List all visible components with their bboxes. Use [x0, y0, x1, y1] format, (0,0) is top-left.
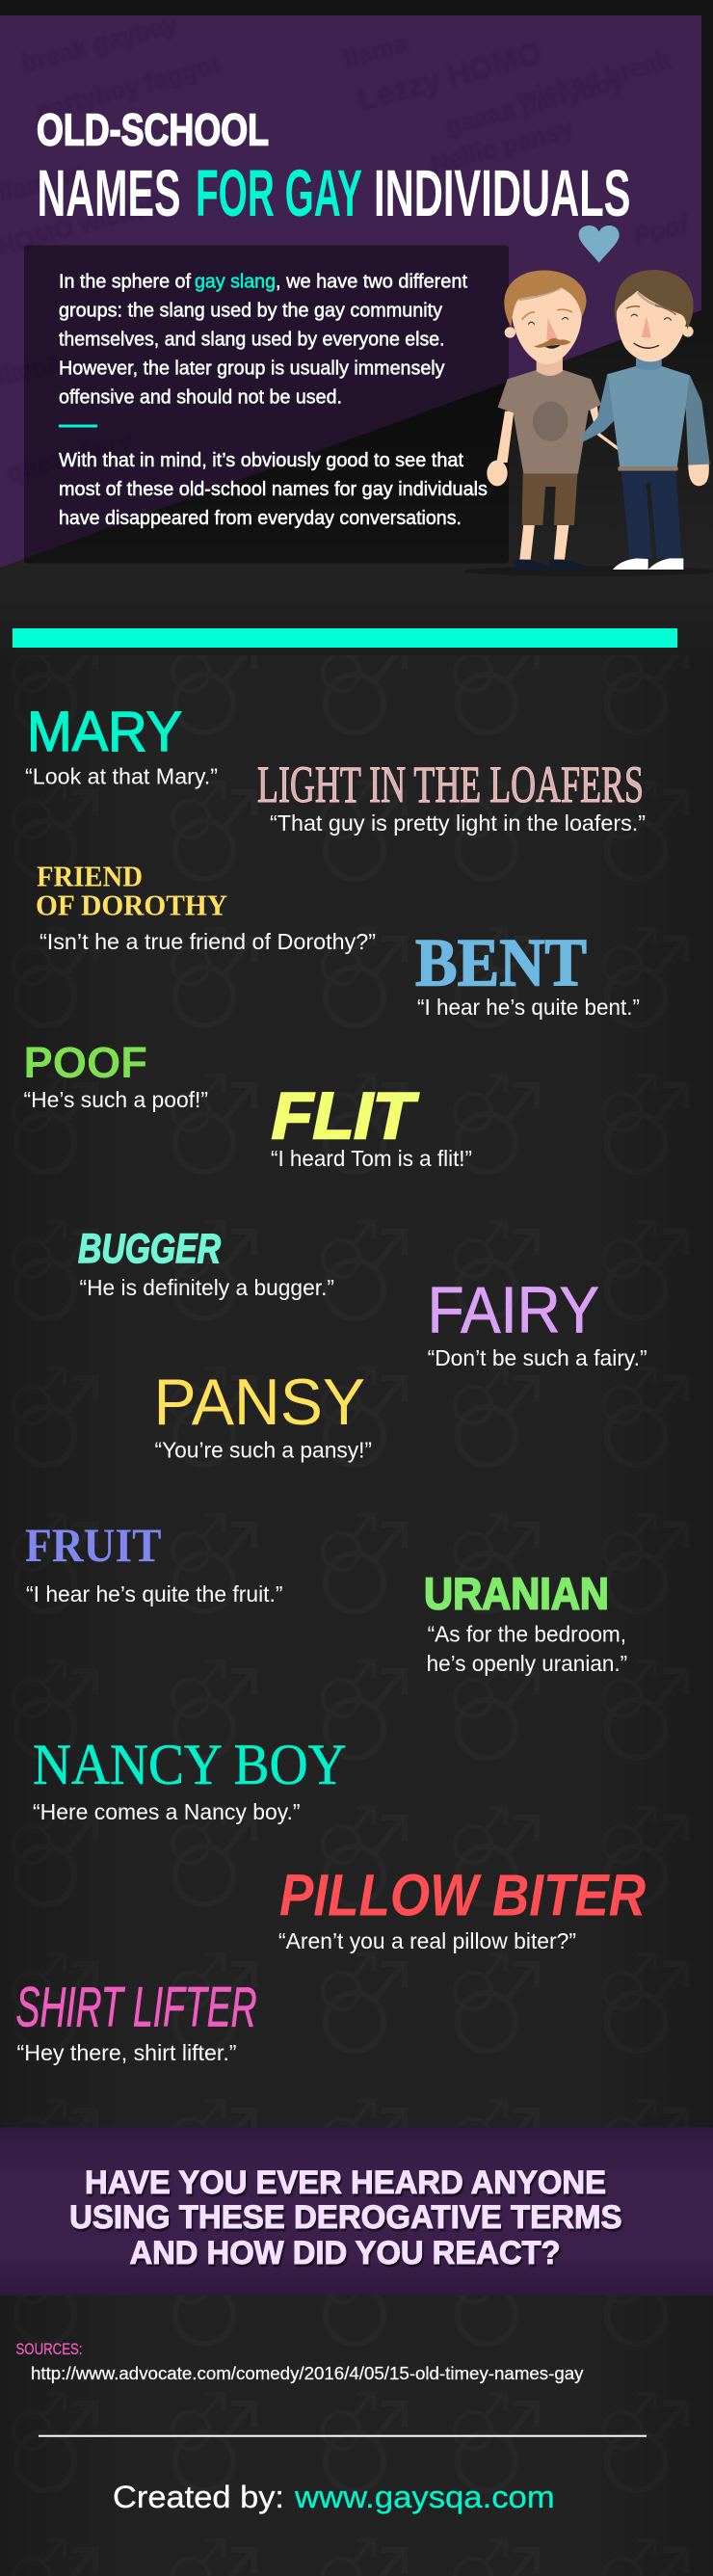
intro paragraph 1: , we have two different — [276, 271, 467, 292]
term: Flit: FLIT — [272, 1079, 419, 1153]
intro paragraph 1: groups: the slang used by the gay community — [59, 300, 442, 321]
intro paragraph 1: In the sphere of — [59, 271, 191, 292]
term: Uranian: he’s openly uranian.” — [427, 1651, 627, 1676]
intro paragraph 1: themselves, and slang used by everyone else. — [59, 329, 445, 350]
term: Poof: “He’s such a poof!” — [23, 1087, 208, 1112]
term: Uranian: URANIAN — [424, 1569, 609, 1619]
term: Fairy — [428, 1274, 647, 1370]
header background: queer fairy — [4, 426, 135, 488]
term: Pansy: PANSY — [154, 1366, 365, 1439]
term: Fairy: FAIRY — [428, 1274, 599, 1347]
title line 1: OLD-SCHOOL — [37, 104, 269, 154]
panel: intro text — [24, 245, 509, 563]
footer credit: www.gaysqa.com — [294, 2480, 555, 2514]
term: Uranian: “As for the bedroom, — [428, 1621, 626, 1646]
term: Bent: “I hear he’s quite bent.” — [417, 995, 640, 1020]
term: Nancy boy: NANCY BOY — [33, 1733, 347, 1796]
question text: AND HOW DID YOU REACT? — [129, 2235, 561, 2271]
header background: partyboy faggot — [33, 49, 224, 126]
header background: gaaaa partyboy — [442, 65, 627, 141]
question text — [69, 2164, 622, 2271]
sources: http://www.advocate.com/comedy/2016/4/05/15-old-timey-names-gay — [31, 2364, 584, 2383]
intro paragraph 1: gay slang — [195, 271, 276, 292]
man in blue sweater — [583, 270, 710, 570]
term: Pillow biter — [278, 1862, 646, 1953]
ground shadow — [464, 566, 713, 576]
term: Poof: POOF — [23, 1038, 147, 1087]
title — [37, 104, 630, 230]
illustration: couple with heart — [464, 226, 713, 576]
icon: heart — [579, 226, 620, 263]
term: Nancy boy — [33, 1733, 347, 1824]
header background: llama — [341, 28, 410, 73]
term: Friend of Dorothy: FRIEND — [37, 859, 143, 892]
term: Flit: “I heard Tom is a flit!” — [271, 1146, 472, 1171]
intro paragraph 2: most of these old-school names for gay individuals — [59, 479, 488, 500]
footer credit — [113, 2480, 555, 2514]
sources — [15, 2340, 584, 2383]
term: Friend of Dorothy: “Isn’t he a true friend of Dorothy?” — [40, 929, 376, 954]
intro paragraph 1: offensive and should not be used. — [59, 386, 342, 408]
term: Bent: BENT — [415, 926, 587, 1001]
term: Light in the loafers — [257, 756, 646, 836]
term: Fairy: “Don’t be such a fairy.” — [428, 1345, 647, 1370]
question text: HAVE YOU EVER HEARD ANYONE — [85, 2164, 606, 2201]
term: Pansy: “You’re such a pansy!” — [154, 1438, 372, 1463]
intro paragraph 1: However, the later group is usually immensely — [59, 358, 445, 379]
term: Light in the loafers: “That guy is pretty light in the loafers.” — [270, 810, 646, 836]
term: Bugger — [78, 1226, 334, 1300]
header background: Poof — [630, 208, 694, 252]
term: Bugger: “He is definitely a bugger.” — [79, 1275, 334, 1300]
sources: SOURCES: — [15, 2340, 83, 2358]
header background: JUICY — [505, 277, 584, 324]
title line 2: NAMES — [37, 156, 181, 230]
term: Mary: MARY — [27, 701, 182, 763]
panel: call to action — [0, 2128, 713, 2296]
intro paragraph 2: With that in mind, it’s obviously good to see that — [59, 450, 463, 471]
term: Poof — [23, 1038, 208, 1112]
divider bar — [13, 628, 677, 648]
header background: Nellie pansy — [428, 113, 577, 179]
header background — [0, 0, 713, 655]
man with mustache — [487, 271, 618, 570]
header background: break gaybay — [18, 9, 181, 78]
term: Mary — [25, 701, 218, 789]
term: Pillow biter: “Aren’t you a real pillow biter?” — [278, 1928, 576, 1953]
intro paragraph 1 — [59, 271, 467, 408]
intro paragraph 2 — [59, 450, 488, 529]
term: Shirt lifter: “Hey there, shirt lifter.” — [17, 2040, 237, 2065]
term: Pillow biter: PILLOW BITER — [279, 1862, 646, 1927]
term: Fruit — [25, 1518, 283, 1607]
footer credit: Created by: — [113, 2480, 284, 2514]
term: Bent — [415, 926, 640, 1020]
term: Shirt lifter: SHIRT LIFTER — [15, 1977, 256, 2039]
term: Bugger: BUGGER — [78, 1226, 221, 1272]
term: Mary: “Look at that Mary.” — [25, 764, 218, 789]
term: Fruit: “I hear he’s quite the fruit.” — [26, 1581, 283, 1607]
question text: USING THESE DEROGATIVE TERMS — [69, 2199, 622, 2236]
title line 2: FOR GAY — [196, 156, 362, 230]
term: Friend of Dorothy — [36, 859, 376, 954]
title line 2 — [37, 156, 630, 230]
term: Friend of Dorothy: OF DOROTHY — [36, 888, 227, 921]
term: Uranian — [424, 1569, 627, 1676]
header background: wicked break — [514, 44, 674, 114]
term: Flit — [271, 1079, 472, 1171]
header background: Lezzy HOMO — [354, 35, 545, 118]
term: Nancy boy: “Here comes a Nancy boy.” — [33, 1799, 301, 1824]
term: Fruit: FRUIT — [25, 1518, 162, 1572]
term: Shirt lifter — [15, 1977, 256, 2065]
intro paragraph 2: have disappeared from everyday conversations. — [59, 508, 462, 529]
